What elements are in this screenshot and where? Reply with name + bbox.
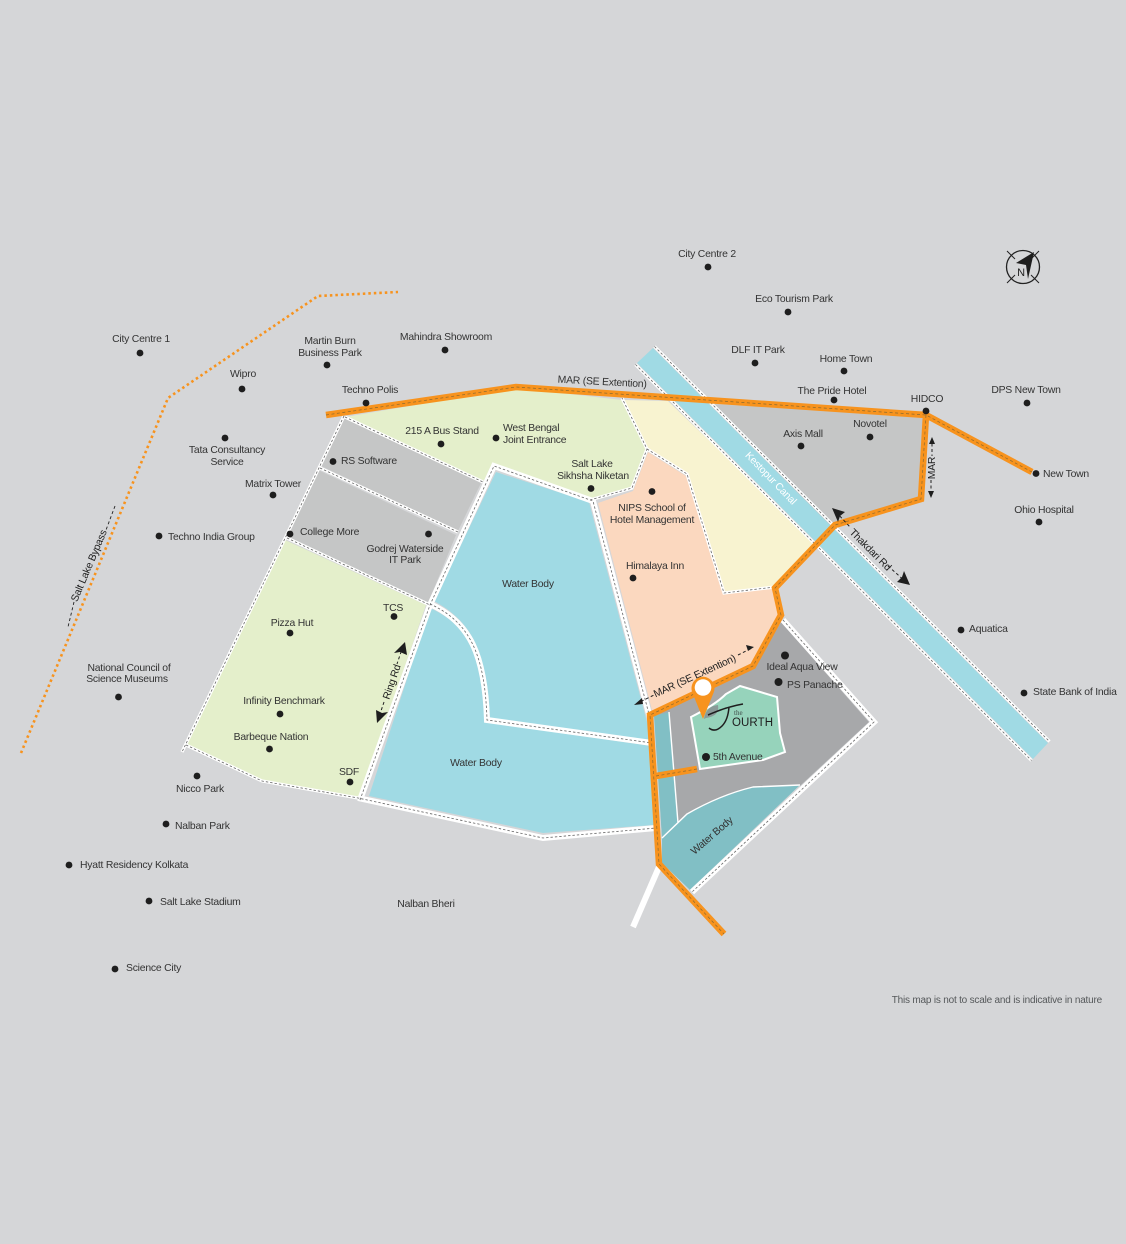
logo script T	[708, 704, 743, 730]
poi: Barbeque Nation: Barbeque Nation	[234, 732, 309, 743]
poi: Techno Polis: Techno Polis	[342, 385, 398, 396]
label: water body south east: Water Body	[689, 814, 736, 857]
zone: grey strip one	[321, 417, 481, 531]
poi: Tata Consultancy Service	[189, 435, 266, 468]
poi: Axis Mall: Axis Mall	[783, 429, 823, 440]
label: MAR lower	[634, 645, 754, 705]
label: Ring Rd: Ring Rd	[382, 663, 404, 701]
label: MAR vertical: MAR	[927, 456, 938, 479]
poi: NIPS School of Hotel Management: Hotel Management	[610, 515, 694, 526]
poi: PS Panache: PS Panache	[787, 680, 843, 691]
label: Salt Lake Bypass: Salt Lake Bypass	[70, 529, 110, 604]
compass: north	[1006, 250, 1040, 284]
Kestopur canal	[637, 348, 1048, 759]
poi: Infinity Benchmark	[243, 696, 326, 717]
road: strip dividers	[287, 417, 483, 605]
water body: channel	[654, 712, 678, 837]
road: MAR centre dashes	[326, 387, 1032, 934]
logo: the Fourth	[704, 704, 773, 730]
poi: SDF: SDF	[339, 767, 359, 778]
poi: National Council of Science Museums: Science Museums	[86, 674, 168, 685]
logo the: the	[734, 709, 743, 717]
poi: Martin Burn Business Park: Business Park	[298, 348, 363, 359]
poi: DLF IT Park: DLF IT Park	[731, 345, 786, 356]
poi: NIPS School of Hotel Management: NIPS School of	[618, 503, 686, 514]
poi: Mahindra Showroom: Mahindra Showroom	[400, 332, 492, 343]
poi: Eco Tourism Park	[755, 294, 834, 315]
logo leaf	[704, 705, 718, 719]
poi: New Town: New Town	[1043, 469, 1089, 480]
poi: National Council of Science Museums	[86, 663, 171, 700]
label: Ring Rd	[376, 642, 407, 723]
road: inner curve	[430, 604, 652, 743]
poi: Techno Polis	[342, 385, 398, 406]
poi: Wipro: Wipro	[230, 369, 256, 380]
poi: Pizza Hut: Pizza Hut	[271, 618, 314, 629]
poi: Barbeque Nation	[234, 732, 309, 752]
poi: Ideal Aqua View	[766, 652, 838, 673]
poi: TCS	[383, 603, 403, 620]
disclaimer note: This map is not to scale and is indicative in nature	[892, 995, 1103, 1006]
water bodies	[369, 348, 1048, 890]
main arterial roads	[326, 387, 1032, 934]
poi: TCS: TCS	[383, 603, 403, 614]
zone: west green	[186, 540, 426, 797]
label: water body north: Water Body	[502, 579, 555, 590]
road: peach borders	[590, 398, 775, 593]
poi: Novotel	[853, 419, 887, 440]
poi: RS Software: RS Software	[341, 456, 397, 467]
poi: Salt Lake Sikhsha Niketan: Salt Lake	[571, 459, 613, 470]
water body: south east	[662, 785, 800, 890]
poi: Mahindra Showroom	[400, 332, 492, 353]
poi: Godrej Waterside IT Park: IT Park	[389, 555, 422, 566]
poi: Godrej Waterside IT Park	[367, 531, 444, 566]
poi: Aquatica: Aquatica	[969, 624, 1008, 635]
poi: City Centre 1: City Centre 1	[112, 334, 170, 345]
zone: upper grey	[712, 404, 923, 527]
label: MAR vertical	[927, 437, 938, 498]
poi: Pizza Hut	[271, 618, 314, 636]
site plot	[691, 686, 785, 769]
poi: Himalaya Inn	[626, 561, 684, 581]
poi: HIDCO	[911, 394, 943, 414]
poi: Martin Burn Business Park	[298, 336, 363, 368]
points of interest	[66, 249, 1117, 974]
poi: Salt Lake Stadium: Salt Lake Stadium	[160, 897, 241, 908]
poi: Axis Mall	[783, 429, 823, 449]
compass: north: N	[1017, 267, 1025, 279]
road labels	[68, 375, 938, 910]
poi: Godrej Waterside IT Park: Godrej Waterside	[367, 544, 444, 555]
poi: Matrix Tower: Matrix Tower	[245, 479, 302, 490]
poi: Eco Tourism Park: Eco Tourism Park	[755, 294, 834, 305]
Salt Lake Bypass dotted road	[21, 292, 398, 753]
poi: PS Panache	[774, 678, 843, 691]
poi: Tata Consultancy Service: Service	[210, 457, 244, 468]
poi: Home Town: Home Town	[820, 354, 873, 365]
poi: DLF IT Park	[731, 345, 786, 366]
poi: Himalaya Inn: Himalaya Inn	[626, 561, 684, 572]
poi: Science City: Science City	[126, 963, 182, 974]
land zones	[186, 388, 923, 838]
label: Thakdari Rd	[832, 508, 910, 585]
label: Kestopur Canal: Kestopur Canal	[743, 450, 798, 507]
road: ring road	[360, 466, 650, 800]
road: south east edge	[692, 620, 874, 892]
zone: lower right grey	[655, 622, 869, 838]
poi: West Bengal Joint Entrance: West Bengal	[503, 423, 559, 434]
poi: Ideal Aqua View: Ideal Aqua View	[766, 662, 838, 673]
poi: Nalban Park: Nalban Park	[175, 821, 231, 832]
poi: NIPS School of Hotel Management	[610, 488, 694, 526]
label: water body south: Water Body	[450, 758, 503, 769]
logo wordmark: OURTH	[732, 717, 773, 729]
poi: Tata Consultancy Service: Tata Consultancy	[189, 445, 266, 456]
road: MAR orange	[326, 387, 1032, 934]
poi: Home Town	[820, 354, 873, 374]
zone: grey strip two	[288, 470, 456, 603]
poi: Matrix Tower	[245, 479, 302, 498]
inner white lines	[662, 712, 800, 838]
water body: south	[369, 608, 654, 833]
poi: National Council of Science Museums: National Council of	[87, 663, 171, 674]
road: south edge	[358, 798, 656, 838]
poi: 5th Avenue: 5th Avenue	[713, 752, 763, 763]
road dashes	[182, 346, 1050, 892]
poi: Salt Lake Sikhsha Niketan: Sikhsha Niketan	[557, 471, 629, 482]
poi: Wipro	[230, 369, 256, 392]
poi: Nicco Park	[176, 773, 225, 795]
poi: State Bank of India: State Bank of India	[1033, 687, 1117, 698]
poi: Novotel: Novotel	[853, 419, 887, 430]
road: canal edges	[636, 346, 1050, 760]
label: MAR top: MAR (SE Extention)	[557, 375, 647, 390]
poi: Salt Lake Sikhsha Niketan	[557, 459, 629, 492]
location pin	[692, 677, 715, 719]
label: MAR lower: MAR (SE Extention)	[652, 653, 738, 700]
road: outer west	[182, 416, 358, 798]
poi: HIDCO: HIDCO	[911, 394, 943, 405]
roads white	[182, 346, 1050, 927]
zone: peach	[598, 452, 781, 714]
label: Thakdari Rd: Thakdari Rd	[847, 527, 893, 574]
water body: north	[434, 472, 652, 741]
poi: 215 A Bus Stand	[405, 426, 479, 447]
poi: City Centre 2: City Centre 2	[678, 249, 736, 260]
zone: yellow	[622, 400, 816, 593]
poi: Techno India Group: Techno India Group	[168, 532, 255, 543]
label: Salt Lake Bypass	[68, 506, 115, 627]
poi: West Bengal Joint Entrance	[493, 423, 567, 446]
poi: DPS New Town: DPS New Town	[991, 385, 1061, 396]
poi: Hyatt Residency Kolkata: Hyatt Residency Kolkata	[80, 860, 189, 871]
poi: DPS New Town	[991, 385, 1061, 406]
poi: Ohio Hospital: Ohio Hospital	[1014, 505, 1074, 516]
road: white stub	[633, 867, 659, 927]
poi: City Centre 2	[678, 249, 736, 270]
poi: The Pride Hotel	[798, 386, 866, 403]
poi: Martin Burn Business Park: Martin Burn	[304, 336, 356, 347]
poi: College More: College More	[300, 527, 360, 538]
poi: Infinity Benchmark: Infinity Benchmark	[243, 696, 326, 707]
poi: City Centre 1	[112, 334, 170, 356]
poi: The Pride Hotel: The Pride Hotel	[798, 386, 866, 397]
poi: SDF	[339, 767, 359, 785]
poi: Nicco Park: Nicco Park	[176, 784, 225, 795]
zone: north green	[345, 388, 647, 500]
poi: Ohio Hospital	[1014, 505, 1074, 525]
poi: West Bengal Joint Entrance: Joint Entrance	[503, 435, 567, 446]
poi: 215 A Bus Stand: 215 A Bus Stand	[405, 426, 479, 437]
label: Nalban Bheri: Nalban Bheri	[397, 899, 455, 910]
